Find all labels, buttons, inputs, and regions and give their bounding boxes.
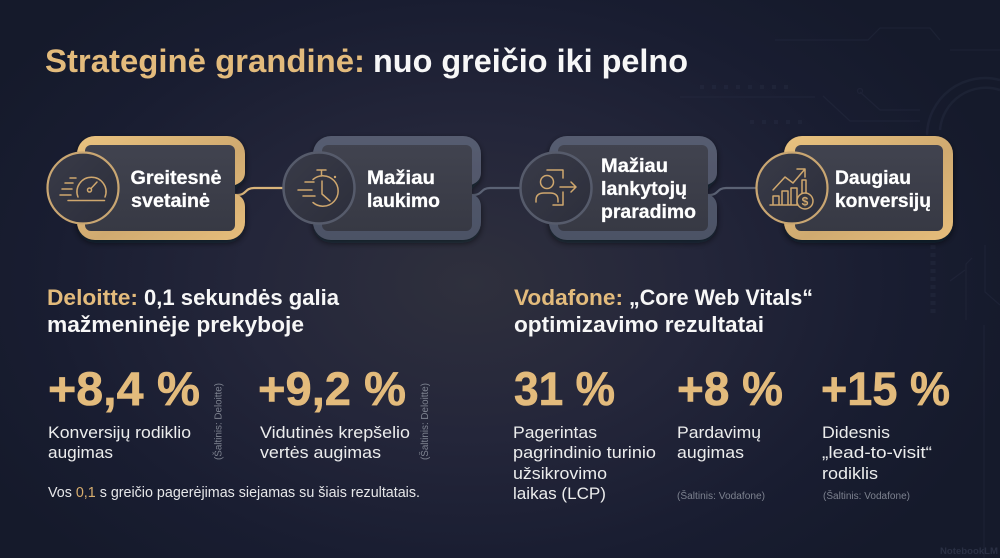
stat: conversion rate: (Šaltinis: Deloitte) xyxy=(212,383,224,460)
step label: konversijų xyxy=(835,191,931,212)
connector: step 3 to 4 xyxy=(704,188,757,195)
stat: average basket value xyxy=(258,362,431,462)
stat: sales: +8 % xyxy=(677,362,783,415)
stat: sales: (Šaltinis: Vodafone) xyxy=(677,489,765,502)
decorative circuit pattern xyxy=(680,28,1000,558)
stat: conversion rate: Konversijų rodiklio xyxy=(48,423,191,442)
heading: Deloitte: Deloitte: xyxy=(47,285,138,310)
heading: Vodafone: „Core Web Vitals“ xyxy=(629,285,813,310)
stat: LCP: Pagerintas xyxy=(513,423,597,442)
stat: lead-to-visit: Didesnis xyxy=(822,423,890,442)
title xyxy=(45,43,688,79)
icon: visitor leaving xyxy=(520,152,592,224)
connector: step 1 to 2 xyxy=(232,188,284,195)
step 1: Greitesnė svetainė xyxy=(48,136,245,240)
stat: LCP: užsikrovimo xyxy=(513,464,607,483)
icon: stopwatch xyxy=(284,152,354,224)
heading: Vodafone: Vodafone: xyxy=(514,285,623,310)
stat: average basket value: (Šaltinis: Deloitte) xyxy=(418,383,431,460)
stat: sales: augimas xyxy=(677,443,744,462)
step label: svetainė xyxy=(131,191,210,212)
panel: Deloitte xyxy=(47,285,431,501)
panel: Vodafone xyxy=(513,285,950,503)
note: Vos 0,1 s greičio pagerėjimas siejamas su šiais rezultatais. xyxy=(48,485,420,501)
step label: laukimo xyxy=(367,191,440,212)
stat: lead-to-visit: rodiklis xyxy=(822,464,878,483)
stat: conversion rate: augimas xyxy=(48,443,113,462)
stat: lead-to-visit: (Šaltinis: Vodafone) xyxy=(823,489,910,502)
stat: sales xyxy=(677,362,783,502)
icon: growth chart with coin xyxy=(756,152,828,224)
stat: LCP: pagrindinio turinio xyxy=(513,443,656,462)
stat: LCP xyxy=(513,362,656,503)
title: Strateginė grandinė: xyxy=(45,43,365,79)
icon: speedometer xyxy=(48,152,118,224)
stat: conversion rate xyxy=(48,362,224,462)
heading: Deloitte: mažmeninėje prekyboje xyxy=(47,312,304,337)
watermark: NotebookLM xyxy=(940,546,998,557)
stat: lead-to-visit xyxy=(821,362,950,502)
step label xyxy=(367,168,440,212)
step label: praradimo xyxy=(601,202,696,223)
step label xyxy=(601,156,696,223)
heading: Deloitte xyxy=(47,285,340,337)
heading: Vodafone: optimizavimo rezultatai xyxy=(514,312,764,337)
step label: lankytojų xyxy=(601,179,687,200)
connector: step 2 to 3 xyxy=(468,188,521,195)
stat: average basket value: vertės augimas xyxy=(260,443,381,462)
heading: Vodafone xyxy=(514,285,813,337)
step label xyxy=(835,168,931,212)
stat: lead-to-visit: „lead-to-visit“ xyxy=(822,443,932,462)
step label: Mažiau xyxy=(367,168,435,189)
icon: growth chart with coin: $ xyxy=(802,194,809,208)
title: nuo greičio iki pelno xyxy=(373,43,688,79)
stat: conversion rate: +8,4 % xyxy=(48,362,200,415)
step label: Greitesnė xyxy=(130,168,222,189)
heading: Deloitte: 0,1 sekundės galia xyxy=(144,285,340,310)
step 4: Daugiau konversijų xyxy=(756,136,953,240)
step label: Mažiau xyxy=(601,156,668,177)
step 3: Mažiau lankytojų praradimo xyxy=(520,136,717,240)
stat: sales: Pardavimų xyxy=(677,423,761,442)
step label: Daugiau xyxy=(835,168,911,189)
stat: average basket value: +9,2 % xyxy=(258,362,406,415)
stat: LCP: laikas (LCP) xyxy=(513,484,606,503)
stat: LCP: 31 % xyxy=(514,362,615,415)
step 2: Mažiau laukimo xyxy=(284,136,481,240)
step label xyxy=(130,168,222,212)
stat: average basket value: Vidutinės krepšelio xyxy=(260,423,410,442)
stat: lead-to-visit: +15 % xyxy=(821,362,950,415)
